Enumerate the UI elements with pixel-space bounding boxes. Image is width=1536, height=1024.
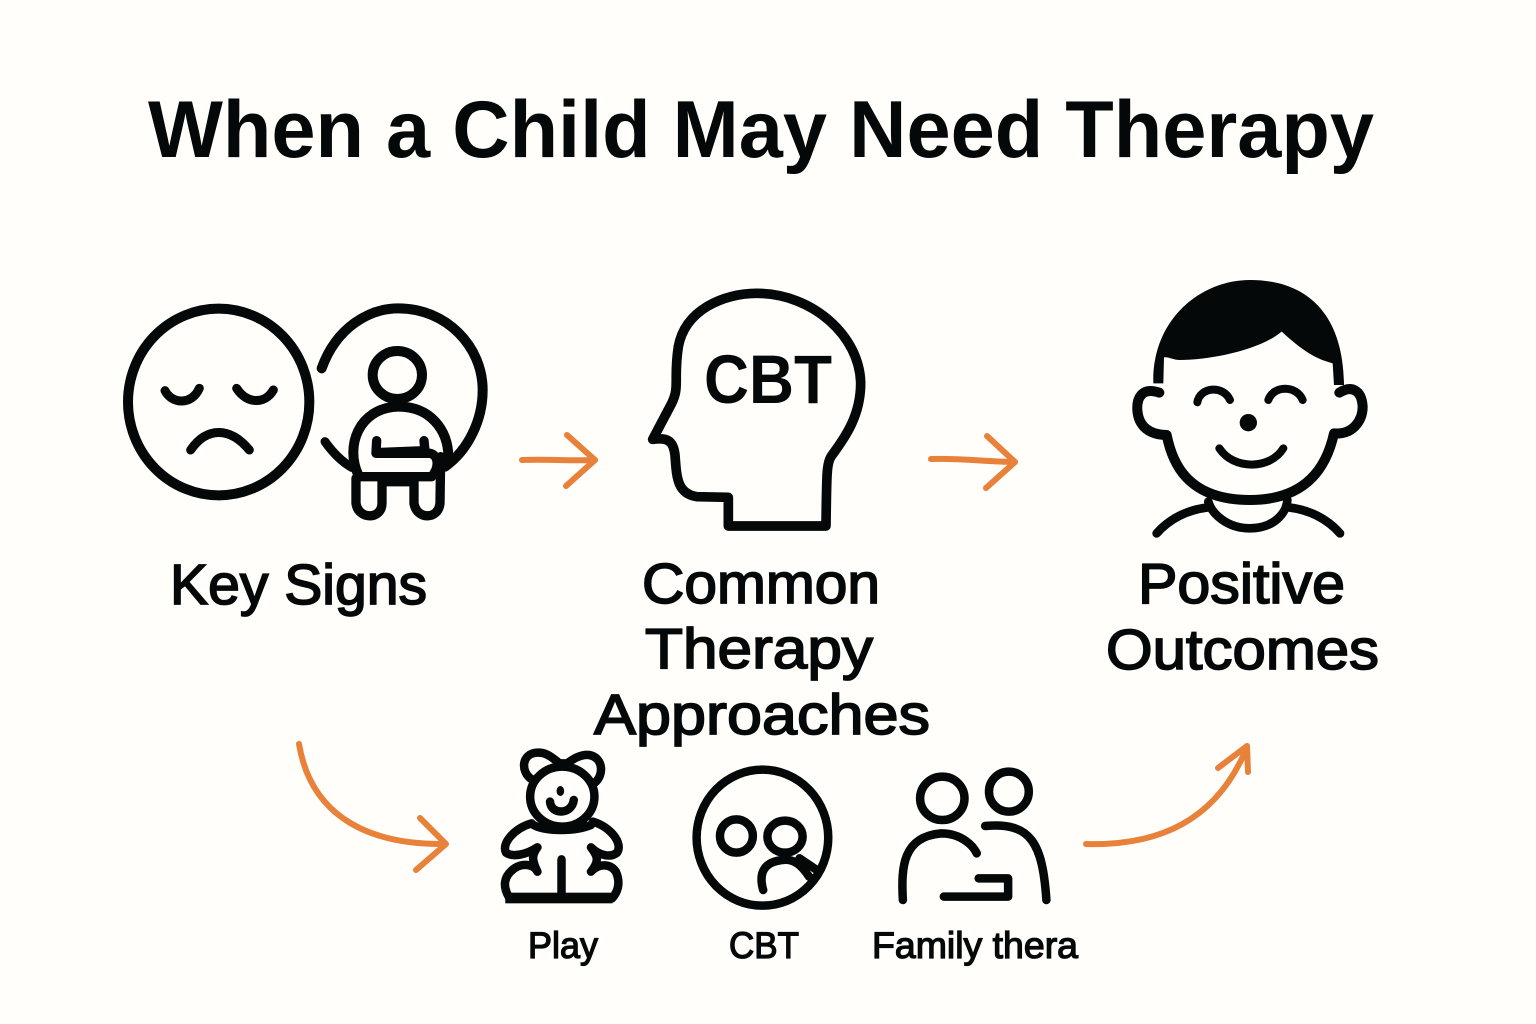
icon: seated child in circle xyxy=(322,308,483,516)
label: common therapy approaches: Therapy xyxy=(645,617,874,681)
arrow: therapy to outcomes xyxy=(931,436,1015,488)
arrow: approaches up to outcomes xyxy=(1086,746,1248,844)
label: positive outcomes: Outcomes xyxy=(1106,618,1379,682)
icon: cbt circle with two figures xyxy=(697,770,828,906)
label: positive outcomes: Positive xyxy=(1138,552,1345,616)
label: positive outcomes xyxy=(1106,552,1379,682)
label: play: Play xyxy=(528,925,598,966)
label: family thera: Family thera xyxy=(872,925,1078,966)
panel: common therapy approaches xyxy=(594,293,930,747)
label: key signs: Key Signs xyxy=(170,553,427,617)
icon: head with CBT: CBT xyxy=(704,341,832,418)
icon: family figures xyxy=(902,772,1046,900)
panel: key signs xyxy=(128,308,483,617)
panel: therapy approach icons xyxy=(505,753,1078,966)
icon: head with CBT xyxy=(653,293,861,526)
label: cbt: CBT xyxy=(729,925,799,966)
label: common therapy approaches: Approaches xyxy=(594,683,930,747)
icon: teddy bear xyxy=(505,753,619,903)
arrow: key signs to therapy xyxy=(522,435,595,486)
label: common therapy approaches: Common xyxy=(642,552,880,616)
icon: sad face xyxy=(128,309,309,495)
icon: smiling child xyxy=(1137,280,1363,533)
title: When a Child May Need Therapy xyxy=(148,85,1374,175)
arrow: key signs down to approaches xyxy=(299,744,446,870)
label: common therapy approaches xyxy=(594,552,930,747)
panel: positive outcomes xyxy=(1106,280,1379,682)
